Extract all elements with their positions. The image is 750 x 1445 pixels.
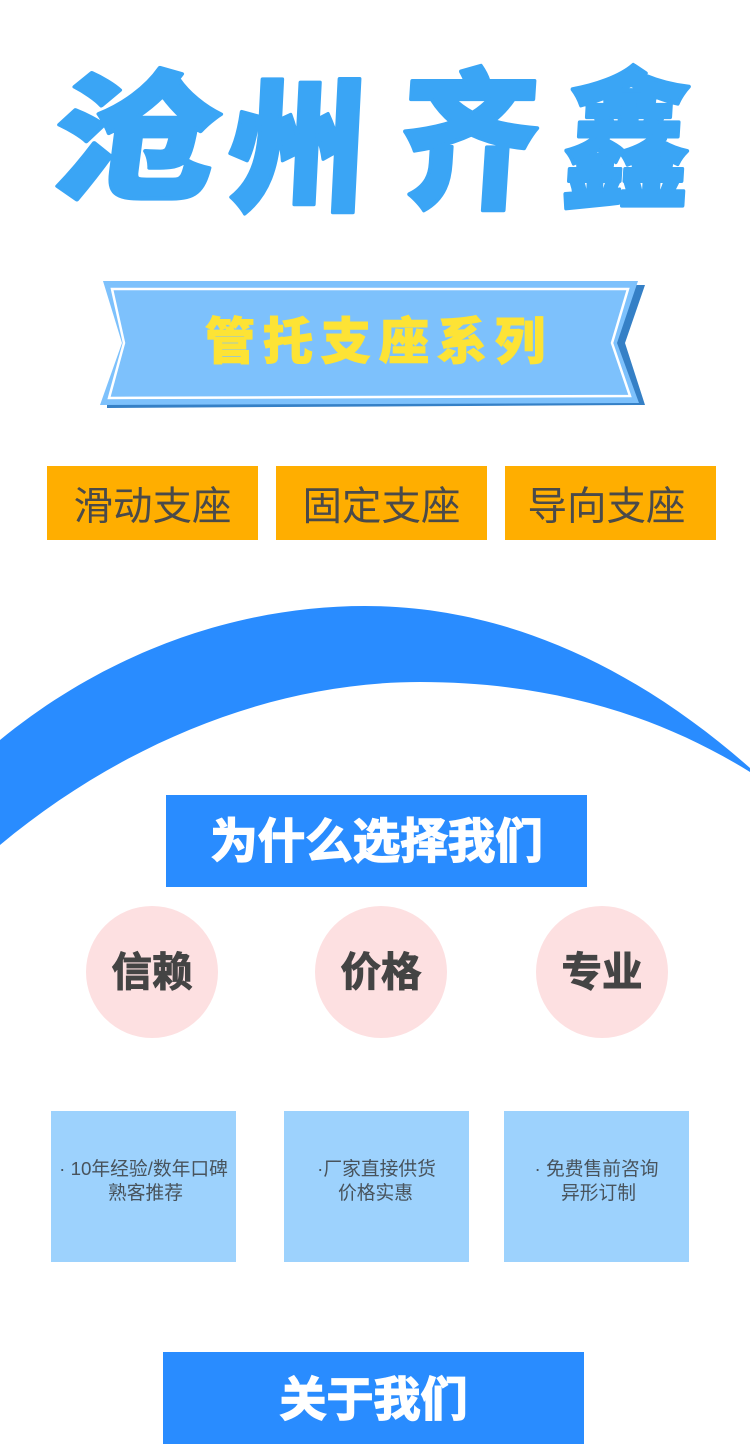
heading: about us: 关于我们 <box>280 1373 468 1426</box>
heading: about us <box>163 1352 584 1444</box>
circle: price <box>315 906 447 1038</box>
title: 鑫 <box>558 59 697 227</box>
card: free consulting: · 免费售前咨询 <box>535 1158 658 1179</box>
card: experience <box>51 1111 236 1262</box>
card: experience: · 10年经验/数年口碑 <box>59 1158 228 1179</box>
tag: guide support <box>505 466 716 540</box>
banner ribbon <box>100 281 639 405</box>
tag: sliding support <box>47 466 258 540</box>
title: 州 <box>224 69 371 230</box>
banner inner outline <box>109 289 630 398</box>
card: experience: 熟客推荐 <box>108 1182 183 1203</box>
circle: trust: 信赖 <box>112 949 192 995</box>
heading: why choose us <box>166 795 587 887</box>
circle: professional <box>536 906 668 1038</box>
heading: why choose us: 为什么选择我们 <box>210 816 543 869</box>
card: free consulting <box>504 1111 689 1262</box>
banner shadow <box>107 285 645 408</box>
banner text: 管托支座系列 <box>205 314 553 370</box>
title: 沧 <box>42 63 230 218</box>
circle: trust <box>86 906 218 1038</box>
card: factory direct: ·厂家直接供货 <box>317 1158 436 1179</box>
title: 齐 <box>395 60 544 228</box>
banner: pipe support series <box>100 281 645 408</box>
card: free consulting: 异形订制 <box>561 1182 636 1203</box>
card: factory direct <box>284 1111 469 1262</box>
blue arc <box>0 606 750 845</box>
tag: guide support: 导向支座 <box>528 485 686 529</box>
card: factory direct: 价格实惠 <box>338 1182 413 1203</box>
tag: fixed support <box>276 466 487 540</box>
title <box>42 59 697 230</box>
tag: sliding support: 滑动支座 <box>74 485 232 529</box>
circle: price: 价格 <box>340 949 422 995</box>
tag: fixed support: 固定支座 <box>302 485 460 529</box>
circle: professional: 专业 <box>562 949 642 995</box>
